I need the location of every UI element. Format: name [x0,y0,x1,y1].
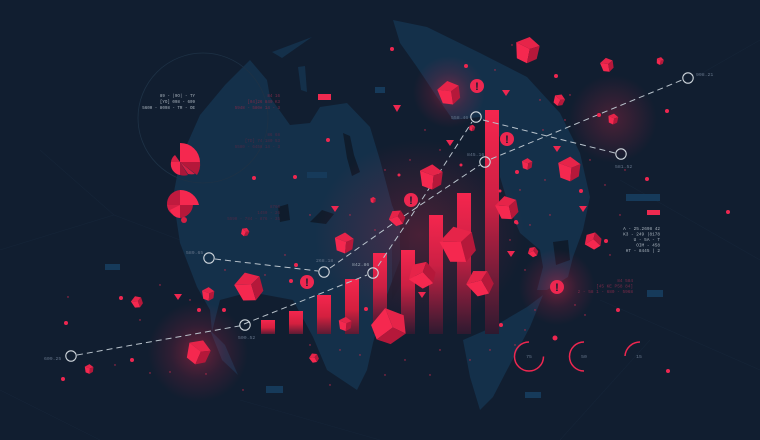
node value labels: 609.25 [44,356,61,362]
data text block: upper left: 89 - |9O| - TY [160,94,195,99]
data text block: red labels: 5590 - 784 - 876 - 35 [227,218,280,222]
data text block: upper left: 5600 - 8098 - TR - OE [142,107,195,111]
data text block: red labels: [04]26 840 K3 [247,100,280,105]
alert icons: ! [475,81,479,93]
node value labels: 268.18 [316,258,333,264]
dashed trend lines [77,80,682,355]
gauge labels: 75 [526,354,532,360]
alert icons: ! [305,277,309,289]
alert icons: ! [555,282,559,294]
node value labels: 558.46 [451,115,468,121]
node value labels: 998.21 [696,72,713,78]
data text block: upper left [142,94,195,111]
node value labels: 581.52 [615,164,632,170]
node value labels [44,72,713,362]
data text block: red labels: 5580 - 6458 14 - 3 [235,146,280,150]
data text block: red labels: 1450 - 26 [257,212,280,216]
gauge labels: 15 [636,354,642,360]
data text block: right white: HT - 8445 | 2 [626,249,660,254]
node value labels: 842.86 [352,262,369,268]
world map land masses [173,20,590,410]
floating cubes [85,36,664,374]
dark lakes and seas [278,133,570,300]
red dots [61,47,730,381]
data text block: right red: 84 584 [617,279,633,284]
triangle markers [174,90,587,300]
gauge labels [526,354,642,360]
data text block: red labels: 8760 [270,206,280,210]
glow halos [148,56,657,402]
data text block: red labels: [TD] 74 180 53 [245,139,280,144]
node value labels: 500.52 [238,335,255,341]
trend line nodes [66,73,693,361]
alert icons [300,79,564,294]
data text block: right white: A - 25.2698 42 [623,227,660,232]
alert icons: ! [409,195,413,207]
radial pie icon top [171,143,200,176]
data text block: right white: OIM - 458 [636,244,660,248]
small blue tags [105,87,663,398]
node value labels: 589.65 [186,250,203,256]
data text block: red labels: 86 68 [267,134,280,138]
alert icons: ! [505,134,509,146]
node value labels: 845.16 [467,152,484,158]
thin circle outline [138,53,268,183]
data text block: upper left: [YO] 098 - 609 [160,100,195,105]
data text block: red labels: 84 16 [267,95,280,99]
fine speckle particles [67,44,626,391]
data text block: red labels [227,95,280,222]
data text block: red labels: 5948 - 580e 14 - 3 [235,107,280,111]
data text block: right white: U - 5A - T [634,238,660,243]
data text block: right white [623,227,660,254]
gauge labels: 50 [581,354,587,360]
gauge rings [514,342,640,371]
data text block: right red: 2 - 58 1 - 680 - 5968 [578,290,633,295]
data text block: right red [578,279,633,295]
data text block: right red: [45 KE P58 84] [596,284,633,290]
radial pie icon bottom [167,190,199,223]
bar chart [261,110,499,334]
red tags [318,94,660,215]
data text block: right white: K3 - 249 |8178 [623,232,660,238]
